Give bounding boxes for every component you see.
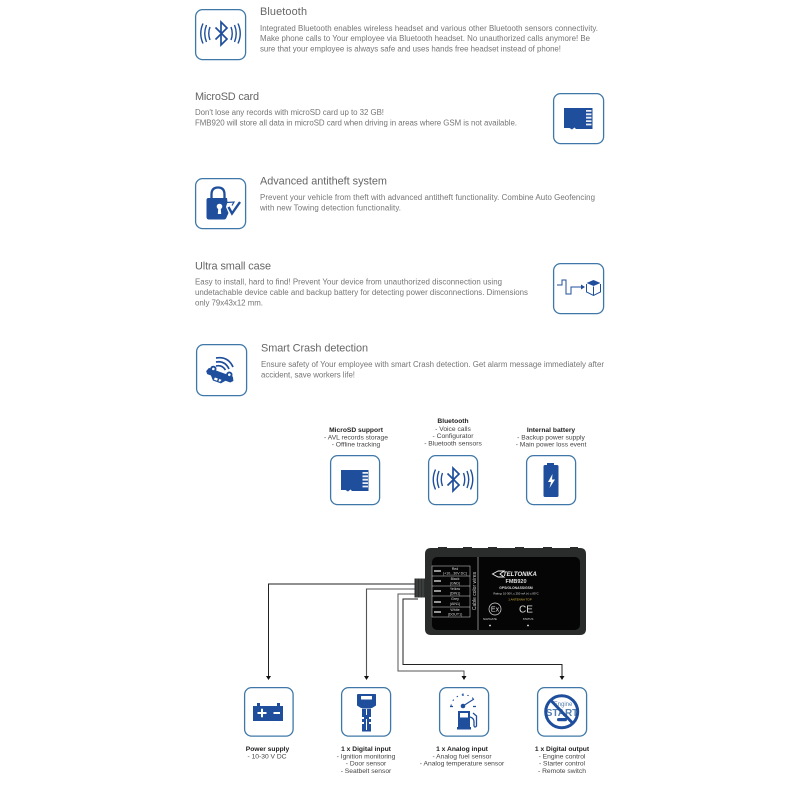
text block: Analog input label: - Analog temperature sensor [420,760,505,768]
text block: Bluetooth label: - Voice calls [435,426,471,433]
heading: Bluetooth: Bluetooth [260,6,307,18]
text block: crash detection description [261,360,604,380]
cable colour table: (DOUT1) [448,612,462,616]
text block: Ultra small case description: undetachable device cable and backup battery for detecting power disconnections. Dimensions [195,288,528,297]
arrow: power supply wire [266,584,418,680]
arrow: digital input wire [364,589,418,680]
cable colour table: (GND) [450,582,460,586]
panel: Analog input [420,688,505,768]
cable colour table: Yellow [450,587,461,591]
arrow: digital output wire [403,599,564,680]
icon: microSD card [331,456,380,505]
panel: Internal battery [516,427,586,505]
text block: Bluetooth label: - Bluetooth sensors [424,440,482,448]
panel: Bluetooth support [424,418,482,505]
icon: padlock with check [196,179,246,229]
panel: Smart Crash detection feature [197,342,604,396]
text block: Bluetooth description: Make phone calls to Your employee via Bluetooth headset. No unauthorized calls anymore! Be [260,34,591,43]
panel: Digital output [535,688,590,775]
Teltonika branding: Rating: 10-30V, ≤ 250 mA (+) ≤ 85°C [493,592,539,596]
text block: Internal battery label: - Main power loss event [516,442,586,448]
text block: MicroSD support label: - Offline tracking [332,442,381,448]
text block: Bluetooth description: Integrated Bluetooth enables wireless headset and various other Bluetooth sensors connectivity. [260,24,598,33]
text block: Digital output label: - Remote switch [538,768,586,775]
text block: crash detection description: Ensure safety of Your employee with smart Crash detection. Get alarm message immediately after [261,360,604,369]
Teltonika branding [492,571,539,602]
icon: fuel gauge and pump [440,688,489,736]
cable colour table: White [450,608,460,612]
text block: Ultra small case description: only 79x43x12 mm. [195,298,263,308]
text block: MicroSD description: FMB920 will store all data in microSD card when driving in areas where GSM is not available. [195,118,517,128]
text block: antitheft description: with new Towing detection functionality. [259,204,401,212]
navigate and status indicators [483,617,533,626]
heading: MicroSD card: MicroSD card [195,91,259,103]
text block: Digital input label: 1 x Digital input [341,746,392,753]
text block: Power supply label: - 10-30 V DC [247,754,287,760]
text block: MicroSD description [195,108,517,128]
text block: Digital output label: - Starter control [539,760,586,768]
text block: MicroSD support label [324,427,388,448]
text block: Analog input label: - Analog fuel sensor [432,754,492,760]
cable connector [414,578,426,598]
heading: Advanced antitheft system: Advanced antitheft system [260,176,387,188]
device: FMB920 tracker [414,547,586,635]
arrow: analog input wire [398,594,466,680]
icon: car battery [245,688,293,736]
panel: Digital input [337,688,396,775]
cable colour table [432,566,478,617]
text block: Ultra small case description [195,278,528,308]
icon: engine start prohibited [538,688,587,736]
panel: Ultra small case feature [195,260,604,314]
CE mark: CE [519,604,533,616]
text block: Bluetooth label: Bluetooth [437,418,469,425]
device case [425,548,586,635]
text block: Bluetooth label: - Configurator [433,433,474,440]
heading: Ultra small case: Ultra small case [195,260,271,272]
cable colour table: (AIN1) [450,602,460,606]
text block: Digital input label [337,746,396,775]
text block: MicroSD description: Don't lose any records with microSD card up to 32 GB! [195,108,384,117]
navigate and status indicators: STATUS [523,617,533,621]
panel: Power supply [245,688,293,760]
cable colour table: Black [451,577,460,581]
Ex certification mark: Ex [491,606,500,614]
text block: Ultra small case description: Easy to install, hard to find! Prevent Your device from unauthorized disconnection using [195,278,502,286]
icon: Bluetooth [196,10,246,60]
Teltonika branding: FMB920 [505,579,527,585]
icon: microSD card [554,94,604,144]
panel: Advanced antitheft feature [196,176,595,229]
diagram: wires from device to connectors [266,584,564,680]
cable colour table: Grey [451,597,459,601]
text block: Digital input label: - Ignition monitoring [337,754,396,760]
text block: Analog input label [420,746,505,768]
cable colour table: (DIN1) [450,592,460,596]
text block: Digital output label [535,746,590,775]
Ex certification mark [489,603,501,615]
icon: overturned car with signal [197,345,247,396]
icon: pulse and small box [554,264,604,314]
text block: MicroSD support label: MicroSD support [329,427,384,434]
Teltonika branding: GPS/GLONASS/GSM [499,586,533,590]
text block: antitheft description [259,193,595,212]
device front label [432,557,580,630]
text block: Bluetooth description: sure that your employee is always safe and uses hands free headset instead of phone! [260,44,561,54]
text block: Analog input label: 1 x Analog input [436,746,489,753]
text block: Internal battery label [516,427,586,448]
text block: Bluetooth description [260,24,598,54]
text block: Power supply label: Power supply [246,746,290,753]
icon: Bluetooth [429,456,478,505]
text block: crash detection description: accident, save workers life! [261,370,355,380]
text block: Digital output label: 1 x Digital output [535,746,590,753]
cable colour table: Cable color wires [472,571,478,610]
text block: Digital output label: - Engine control [539,754,586,760]
panel: MicroSD support [324,427,388,505]
icon: ignition key [342,688,391,736]
navigate and status indicators: NAVIGATE [483,617,497,621]
text block: Power supply label [246,746,290,760]
divider [477,557,479,630]
icon: engine start prohibited: START [546,708,578,719]
icon: battery with bolt [527,456,576,505]
case top bumps [438,547,578,548]
text block: MicroSD support label: - AVL records storage [324,434,388,442]
text block: Bluetooth label [424,418,482,448]
icon: engine start prohibited: Engine [554,702,573,708]
text block: Internal battery label: Internal battery [527,427,575,434]
panel: MicroSD card feature [195,91,604,144]
Teltonika branding: 1 ANTENNA TOP [508,598,532,602]
heading: Smart Crash detection: Smart Crash detection [261,342,368,354]
text block: Digital input label: - Seatbelt sensor [341,768,392,775]
text block: Internal battery label: - Backup power supply [517,434,585,442]
text block: Digital input label: - Door sensor [346,760,387,768]
cable colour table: Red [452,567,458,571]
text block: antitheft description: Prevent your vehicle from theft with advanced antitheft functionality. Combine Auto Geofencing [260,193,595,202]
cable colour table: (+10...30V DC) [443,572,467,576]
panel: Bluetooth feature [196,6,598,60]
Teltonika branding: TELTONIKA [503,572,537,578]
